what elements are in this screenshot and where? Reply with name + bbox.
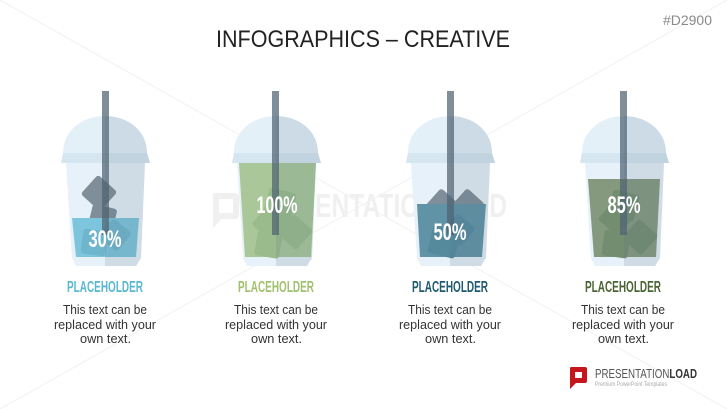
straw [102,91,109,235]
ice cubes [251,187,313,259]
lid band [580,153,669,163]
column 4 text [572,279,674,346]
lid band [61,153,150,163]
cup body [585,163,664,266]
straw [447,91,454,235]
right half shade [105,116,150,266]
ice cubes [425,188,485,222]
column 3 text [399,279,501,346]
lid dome [234,116,318,153]
logo wordmark: PRESENTATIONLOAD [595,367,697,381]
straw [272,91,279,235]
column 2 text: replaced with your [225,318,327,332]
logo tagline: Premium PowerPoint Templates [595,382,667,388]
right half shade [276,116,321,266]
percentage: 30% [88,226,122,253]
logo icon [570,367,587,389]
column 3 text: replaced with your [399,318,501,332]
liquid [72,218,139,257]
column 1 text: replaced with your [54,318,156,332]
right half shade [624,116,669,266]
label 1: PLACEHOLDER [67,279,143,296]
liquid [417,204,486,257]
label 2: PLACEHOLDER [238,279,314,296]
percentage: 50% [434,219,466,246]
liquid [239,163,316,257]
cup 4: 85% [580,91,669,266]
watermark: PRESENTATIONLOAD [248,187,507,224]
label 4: PLACEHOLDER [585,279,661,296]
cup body [237,163,316,266]
product code: #D2900 [663,12,712,28]
lid dome [63,116,147,153]
lid dome [582,116,666,153]
cup body [66,163,145,266]
cup 1: 30% [61,91,150,266]
column 4 text: own text. [598,332,649,346]
percentage: 100% [256,192,298,219]
column 4 text: replaced with your [572,318,674,332]
column 1 text [54,279,156,346]
cup 3: 50% [406,91,495,266]
watermark [213,187,507,228]
cup 2: 100% [232,91,321,266]
percentage: 85% [608,192,640,219]
label 3: PLACEHOLDER [412,279,488,296]
column 1 text: This text can be [63,303,147,317]
column 2 text [225,279,327,346]
title: INFOGRAPHICS – CREATIVE [216,26,510,53]
column 1 text: own text. [80,332,131,346]
lid band [232,153,321,163]
column 3 text: own text. [425,332,476,346]
lid dome [408,116,492,153]
cup body [411,163,490,266]
ice cubes [598,189,658,259]
ice cubes [81,175,118,234]
column 4 text: This text can be [581,303,665,317]
column 3 text: This text can be [408,303,492,317]
liquid [588,179,660,257]
straw [620,91,627,235]
column 2 text: own text. [251,332,302,346]
column 2 text: This text can be [234,303,318,317]
logo [570,367,697,389]
right half shade [450,116,495,266]
lid band [406,153,495,163]
